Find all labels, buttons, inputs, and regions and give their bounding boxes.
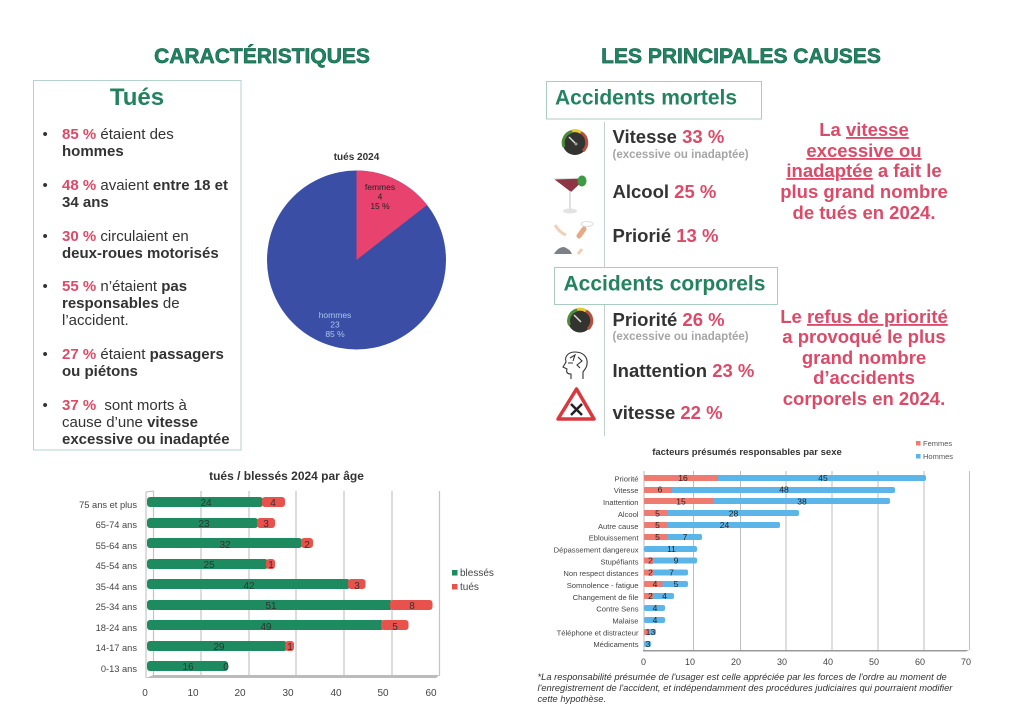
- bar chart: facteurs présumés par sexe: 38: [797, 496, 807, 506]
- bar chart: facteurs présumés par sexe: 5: [655, 508, 660, 518]
- bar chart: tués / blessés par âge: 14-17 ans: [96, 643, 137, 653]
- callout: vitesse: La vitesse: [819, 119, 909, 140]
- bar chart: facteurs présumés par sexe: 70: [961, 657, 971, 667]
- bar chart: facteurs présumés par sexe: Téléphone et distracteur: [557, 628, 639, 638]
- bar chart: facteurs présumés par sexe: 24: [720, 520, 729, 530]
- bar chart: tués / blessés par âge: 25: [203, 560, 215, 571]
- box: accidents mortels: [546, 82, 762, 119]
- bar chart: facteurs présumés par sexe: Somnolence - fatigue: [567, 581, 638, 590]
- bar chart: facteurs présumés par sexe: 60: [915, 657, 925, 667]
- bullet: 55 % pas responsables: l’accident.: [62, 312, 129, 329]
- pie chart: tués 2024: 4: [378, 192, 383, 202]
- bar chart: tués / blessés par âge: 42: [243, 581, 255, 592]
- icon: priorité gestes: [554, 222, 593, 254]
- legend: blessés / tués: blessés: [460, 568, 494, 579]
- bar chart: tués / blessés par âge: 50: [377, 688, 389, 699]
- bar chart: facteurs présumés par sexe: Médicaments: [593, 640, 639, 649]
- box: accidents corporels: [554, 268, 778, 304]
- bullet: 48 % 18-34 ans: •: [42, 177, 48, 194]
- bullet: 37 % vitesse: excessive ou inadaptée: [62, 431, 230, 448]
- bar chart: tués / blessés par âge: tués / blessés 2024 par âge: [209, 469, 364, 483]
- box: accidents mortels: Accidents mortels: [555, 86, 737, 110]
- separator lines: [604, 122, 606, 436]
- pie chart: tués 2024: hommes: [319, 310, 351, 320]
- callout: refus de priorité: a provoqué le plus: [782, 326, 946, 347]
- bullet: 55 % pas responsables: [42, 278, 187, 329]
- bar chart: facteurs présumés par sexe: 4: [662, 591, 667, 601]
- callout: refus de priorité: corporels en 2024.: [783, 388, 945, 409]
- icon: tête inattention: [563, 352, 587, 379]
- bar chart: facteurs présumés par sexe: 28: [729, 508, 738, 518]
- pie chart: tués 2024: 23: [330, 320, 340, 330]
- bar chart: facteurs présumés par sexe: 20: [731, 657, 741, 667]
- bar chart: facteurs présumés par sexe: Priorité: [614, 474, 638, 484]
- bullet: 48 % 18-34 ans: 34 ans: [62, 194, 109, 211]
- bar chart: facteurs présumés par sexe: Vitesse: [614, 486, 638, 495]
- stat: vitesse 33 %: Vitesse 33 %: [612, 126, 724, 147]
- bullet: 30 % deux-roues: deux-roues motorisés: [62, 245, 219, 262]
- footnote: [538, 672, 953, 704]
- legend: blessés / tués: tués: [460, 582, 479, 593]
- bar chart: tués / blessés par âge: 32: [219, 540, 231, 551]
- bullet: 55 % pas responsables: responsables de: [62, 295, 180, 312]
- bullet: 55 % pas responsables: 55 % n’étaient pas: [62, 278, 187, 295]
- bar chart: tués / blessés par âge: 3: [354, 581, 360, 592]
- bullet: 37 % vitesse: [42, 397, 230, 448]
- bar chart: tués / blessés par âge: 30: [282, 688, 294, 699]
- bar chart: facteurs présumés par sexe: 5: [674, 579, 679, 589]
- bar chart: tués / blessés par âge: 3: [263, 519, 269, 530]
- callout: vitesse: inadaptée a fait le: [786, 160, 942, 181]
- bar chart: tués / blessés par âge: 25-34 ans: [96, 602, 137, 612]
- bar chart: tués / blessés par âge: 2: [304, 540, 310, 551]
- bullet: 30 % deux-roues: [42, 228, 219, 262]
- bar chart: facteurs présumés par sexe: 45: [818, 473, 828, 483]
- bullet: 85 % hommes: [42, 126, 174, 160]
- bar chart: tués / blessés par âge: 18-24 ans: [96, 623, 137, 633]
- bar chart: facteurs présumés par sexe: 30: [777, 657, 787, 667]
- bar chart: facteurs présumés par sexe: 9: [674, 556, 679, 566]
- bar chart: facteurs présumés par sexe: 0: [641, 657, 646, 667]
- stat: priorité 26 %: [612, 309, 749, 343]
- footnote: *La responsabilité présumée de l'usager est celle appréciée par les forces de l'ordre au moment de: [538, 672, 947, 682]
- panel: tués: [34, 80, 241, 450]
- legend: femmes / hommes: Hommes: [923, 452, 953, 461]
- bar chart: facteurs présumés par sexe: Alcool: [618, 510, 639, 519]
- box: accidents corporels: Accidents corporels: [564, 272, 765, 296]
- pie chart: tués 2024: 85 %: [325, 329, 345, 339]
- bar chart: facteurs présumés par sexe: 15: [676, 496, 686, 506]
- bar chart: facteurs présumés par sexe: 7: [683, 532, 688, 542]
- bar chart: tués / blessés par âge: 1: [287, 642, 293, 653]
- footnote: l'enregistrement de l'accident, et indépendamment des procédures judiciaires qui pourraient modifier: [538, 683, 953, 693]
- bar chart: facteurs présumés par sexe: 1: [646, 627, 651, 637]
- icon: panneau danger: [558, 389, 594, 419]
- stat: priorité 26 %: Priorité 26 %: [612, 309, 725, 330]
- bar chart: facteurs présumés par sexe: 2: [648, 568, 653, 578]
- bar chart: tués / blessés par âge: 65-74 ans: [96, 520, 137, 530]
- bullet: 30 % deux-roues: •: [42, 228, 48, 245]
- bar chart: tués / blessés par âge: 40: [330, 688, 342, 699]
- heading: les principales causes: LES PRINCIPALES CAUSES: [601, 45, 881, 68]
- bar chart: facteurs présumés par sexe: 6: [658, 484, 663, 494]
- bar chart: facteurs présumés par sexe: 2: [648, 591, 653, 601]
- callout: refus de priorité: grand nombre: [802, 347, 926, 368]
- bar chart: facteurs présumés par sexe: 4: [653, 579, 658, 589]
- stat: priorié 13 %: Priorié 13 %: [612, 225, 718, 246]
- bar chart: tués / blessés par âge: 23: [198, 519, 210, 530]
- bar chart: facteurs présumés par sexe: 48: [779, 484, 789, 494]
- stat: inattention 23 %: Inattention 23 %: [612, 360, 754, 381]
- bullet: 55 % pas responsables: •: [42, 278, 48, 295]
- bar chart: tués / blessés par âge: 1: [268, 560, 274, 571]
- bar chart: facteurs présumés par sexe: 50: [869, 657, 879, 667]
- bullet: 37 % vitesse: •: [42, 397, 48, 414]
- bar chart: tués / blessés par âge: 0-13 ans: [101, 664, 137, 674]
- pie chart: tués 2024: tués 2024: [334, 152, 380, 163]
- stat: vitesse 33 %: (excessive ou inadaptée): [612, 149, 749, 161]
- heading: caractéristiques: CARACTÉRISTIQUES: [154, 45, 370, 68]
- bar chart: facteurs présumés par sexe: 16: [678, 473, 688, 483]
- icon: gauge corporels: [568, 308, 592, 332]
- bar chart: tués / blessés par âge: 8: [409, 601, 415, 612]
- callout: refus de priorité: d’accidents: [813, 367, 915, 388]
- callout: vitesse: [780, 119, 948, 223]
- bar chart: facteurs présumés par sexe: Contre Sens: [596, 604, 639, 614]
- panel title: tués: Tués: [110, 84, 164, 111]
- bullet: 85 % hommes: 85 % étaient des: [62, 126, 174, 143]
- bar chart: facteurs présumés par sexe: [554, 447, 971, 667]
- bullet: 37 % vitesse: cause d’une vitesse: [62, 414, 198, 431]
- bar chart: facteurs présumés par sexe: 11: [667, 544, 676, 554]
- bar chart: facteurs présumés par sexe: 3: [646, 639, 651, 649]
- bar chart: facteurs présumés par sexe: 3: [651, 627, 656, 637]
- bar chart: facteurs présumés par sexe: Inattention: [603, 498, 638, 507]
- bar chart: facteurs présumés par sexe: Malaise: [612, 616, 638, 626]
- bar chart: facteurs présumés par sexe: 40: [823, 657, 833, 667]
- bar chart: facteurs présumés par sexe: 4: [653, 615, 658, 625]
- bar chart: facteurs présumés par sexe: Eblouissement: [589, 534, 639, 542]
- bar chart: tués / blessés par âge: 0: [223, 662, 229, 673]
- stat: vitesse 22 %: vitesse 22 %: [612, 402, 723, 423]
- callout: vitesse: excessive ou: [806, 140, 922, 161]
- pie chart: tués 2024: [267, 152, 446, 350]
- bar chart: facteurs présumés par sexe: 5: [655, 520, 660, 530]
- bar chart: tués / blessés par âge: 0: [142, 688, 148, 699]
- bullet: 37 % vitesse: 37 % sont morts à: [62, 397, 188, 414]
- bar chart: facteurs présumés par sexe: Changement de file: [573, 593, 638, 602]
- bar chart: tués / blessés par âge: 35-44 ans: [96, 582, 137, 592]
- legend: blessés / tués: [452, 568, 494, 593]
- bar chart: facteurs présumés par sexe: 10: [685, 657, 695, 667]
- bar chart: facteurs présumés par sexe: Stupéfiants: [600, 558, 639, 566]
- pie chart: tués 2024: femmes: [365, 182, 395, 192]
- bar chart: tués / blessés par âge: 20: [234, 688, 246, 699]
- stat: alcool 25 %: Alcool 25 %: [612, 181, 716, 202]
- bar chart: facteurs présumés par sexe: 7: [669, 568, 674, 578]
- bar chart: tués / blessés par âge: 51: [265, 601, 277, 612]
- bullet: 27 % passagers ou piétons: 27 % étaient passagers: [62, 346, 224, 363]
- bar chart: tués / blessés par âge: [79, 469, 440, 699]
- icon: cocktail: [554, 176, 586, 214]
- bar chart: tués / blessés par âge: 5: [392, 622, 398, 633]
- bar chart: tués / blessés par âge: 60: [425, 688, 437, 699]
- bar chart: tués / blessés par âge: 29: [213, 642, 225, 653]
- bar chart: facteurs présumés par sexe: Non respect distances: [563, 569, 639, 578]
- footnote: cette hypothèse.: [538, 694, 606, 704]
- bar chart: facteurs présumés par sexe: Autre cause: [598, 522, 638, 531]
- bar chart: tués / blessés par âge: 24: [200, 498, 212, 509]
- pie chart: tués 2024: 15 %: [370, 201, 390, 211]
- icon: gauge mortels: [562, 130, 588, 155]
- bullet: 85 % hommes: •: [42, 126, 48, 143]
- bar chart: facteurs présumés par sexe: 4: [653, 603, 658, 613]
- bullet: 48 % 18-34 ans: 48 % avaient entre 18 et: [62, 177, 228, 194]
- bar chart: tués / blessés par âge: 45-54 ans: [96, 561, 137, 571]
- bar chart: facteurs présumés par sexe: Dépassement dangereux: [554, 546, 639, 554]
- bullet: 27 % passagers ou piétons: •: [42, 346, 48, 363]
- bar chart: tués / blessés par âge: 55-64 ans: [96, 541, 137, 551]
- legend: femmes / hommes: Femmes: [923, 439, 952, 448]
- bullet: 27 % passagers ou piétons: ou piétons: [62, 363, 138, 380]
- legend: femmes / hommes: [916, 439, 953, 461]
- bar chart: tués / blessés par âge: 75 ans et plus: [79, 500, 137, 510]
- bar chart: facteurs présumés par sexe: 5: [655, 532, 660, 542]
- callout: vitesse: plus grand nombre: [780, 181, 948, 202]
- bullet: 48 % 18-34 ans: [42, 177, 228, 211]
- bullet: 85 % hommes: hommes: [62, 143, 124, 160]
- callout: refus de priorité: Le refus de priorité: [780, 306, 948, 327]
- bar chart: facteurs présumés par sexe: facteurs présumés responsables par sexe: [652, 447, 842, 458]
- bar chart: tués / blessés par âge: 10: [187, 688, 199, 699]
- stat: vitesse 33 %: [612, 126, 749, 161]
- bar chart: tués / blessés par âge: 49: [260, 622, 272, 633]
- bar chart: tués / blessés par âge: 4: [270, 498, 276, 509]
- bar chart: facteurs présumés par sexe: 2: [648, 556, 653, 566]
- callout: refus de priorité: [780, 306, 948, 409]
- bullet: 30 % deux-roues: 30 % circulaient en: [62, 228, 189, 245]
- bar chart: tués / blessés par âge: 16: [182, 662, 194, 673]
- bullet: 27 % passagers ou piétons: [42, 346, 224, 380]
- callout: vitesse: de tués en 2024.: [793, 202, 935, 223]
- stat: priorité 26 %: (excessive ou inadaptée): [612, 331, 749, 343]
